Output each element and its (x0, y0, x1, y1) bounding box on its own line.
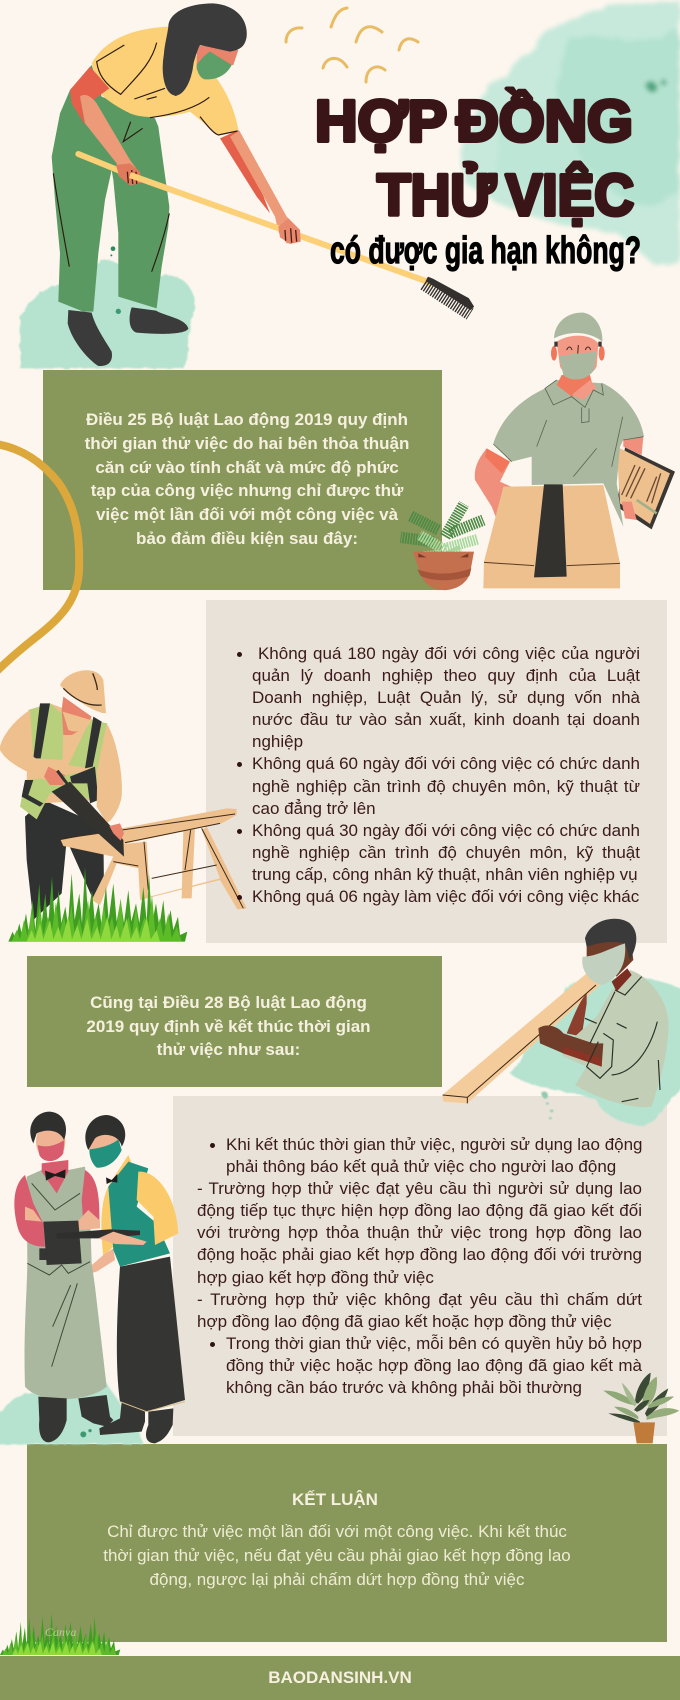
left waiter apron (25, 1167, 107, 1399)
list: end of probation rules: hợp giao kết hợp đồng thử việc (197, 1268, 434, 1287)
text: conclusion: Chỉ được thử việc một lần đối với một công việc. Khi kết thúc (107, 1522, 567, 1541)
safety vest (20, 703, 107, 819)
hair (164, 3, 247, 96)
text: conclusion: thời gian thử việc, nếu đạt yêu cầu phải giao kết hợp đồng lao (103, 1546, 571, 1565)
text: Article 25 intro: Điều 25 Bộ luật Lao động 2019 quy định (86, 410, 408, 429)
right hand on clipboard (622, 502, 637, 520)
sawhorse (61, 808, 247, 909)
packing tape (534, 484, 567, 577)
right waiter bow tie (106, 1174, 117, 1184)
figure: carpenter with saw (0, 670, 247, 942)
potted plant bottom right (603, 1373, 679, 1443)
list: probation limits: nghiệp (252, 732, 303, 751)
list: end of probation rules: Trong thời gian thử việc, mỗi bên có quyền hủy bỏ hợp (226, 1334, 642, 1353)
title line 2: THỬ VIỆC (377, 163, 634, 228)
shirt (92, 27, 238, 135)
right arm (220, 130, 270, 213)
right waiter head (88, 1123, 120, 1160)
heading: conclusion: KẾT LUẬN (292, 1490, 378, 1509)
left hand (116, 163, 142, 185)
panel: Article 25 intro (43, 370, 442, 590)
back sawhorse leg (182, 828, 195, 898)
face mask (559, 352, 597, 380)
list: probation limits: cao đẳng trở lên (252, 799, 376, 818)
pen (637, 500, 657, 513)
panel: Article 28 intro (27, 956, 442, 1087)
list: end of probation rules: không cần báo trước và không phải bồi thường (226, 1378, 582, 1397)
trousers (25, 800, 104, 920)
long hair strand (160, 26, 197, 97)
shirt and pocket lines (53, 43, 237, 272)
text: conclusion: động, ngược lại phải chấm dứt hợp đồng thử việc (150, 1570, 524, 1589)
rake handle left part (78, 154, 130, 175)
list: probation limits: Không quá 06 ngày làm việc đối với công việc khác (252, 887, 639, 906)
list: probation limits: Doanh nghiệp, Luật Quản lý, sử dụng vốn nhà (252, 688, 640, 707)
list: end of probation rules: đồng thử việc hoặc hợp đồng lao động đã giao kết mà (226, 1356, 642, 1375)
list: probation limits: quản lý doanh nghiệp theo quy định của Luật (252, 666, 640, 685)
neck (612, 968, 632, 992)
shirt (560, 970, 668, 1107)
panel: conclusion (27, 1444, 667, 1642)
plank (442, 973, 600, 1103)
text: Article 28 intro: Cũng tại Điều 28 Bộ luật Lao động (90, 993, 367, 1012)
trousers (52, 65, 169, 312)
decorative arcs (286, 8, 418, 82)
figure: delivery man with box (401, 313, 675, 590)
potted fern (401, 504, 483, 590)
right hand on rake (278, 218, 301, 244)
list: probation limits: trung cấp, công nhân kỹ thuật, nhân viên nghiệp vụ (252, 865, 638, 884)
face (587, 933, 633, 977)
text: Article 28 intro (86, 993, 371, 1059)
shirt lines (585, 977, 660, 1102)
left waiter legs and shoes (38, 1397, 67, 1442)
right arm (97, 723, 122, 823)
watercolor blob under woman (20, 260, 195, 368)
apron lines (27, 1183, 90, 1367)
grass (8, 867, 187, 942)
text: Article 28 intro: 2019 quy định về kết thúc thời gian (86, 1017, 371, 1036)
left waiter shirt front (42, 1160, 68, 1193)
left arm (475, 448, 520, 523)
helmet (60, 670, 106, 713)
torso (27, 703, 103, 803)
list: end of probation rules: - Trường hợp thử việc đạt yêu cầu thì người sử dụng lao (197, 1179, 642, 1198)
box (483, 485, 620, 588)
vest straps (22, 703, 102, 807)
rake head (424, 279, 472, 314)
eyes and nose (567, 345, 591, 355)
list: end of probation rules: động tiếp tục thực hiện hợp đồng lao động đã giao kết đối (197, 1201, 642, 1220)
list: end of probation rules: hợp đồng lao động đã giao kết hoặc hợp đồng thử việc (197, 1312, 612, 1331)
list: end of probation rules: - Trường hợp thử việc không đạt yêu cầu thì chấm dứt (197, 1290, 642, 1309)
decorative yellow curve (0, 444, 79, 672)
figure: two waiters (0, 1112, 185, 1444)
clipboard (617, 447, 675, 529)
forearm behind clipboard (623, 437, 643, 455)
text: Article 25 intro (84, 410, 409, 548)
list: end of probation rules (197, 1135, 643, 1397)
watercolor blob: top right (460, 0, 680, 265)
left waiter head (36, 1122, 65, 1161)
hand on wood (109, 823, 124, 841)
figure: man carrying plank (442, 919, 668, 1107)
text: Article 25 intro: việc một lần đối với một công việc và (96, 505, 398, 524)
shirt (493, 380, 644, 527)
right waiter apron (117, 1257, 185, 1412)
text: Article 25 intro: thời gian thử việc do hai bên thỏa thuận (85, 434, 409, 453)
footer: site name: BAODANSINH.VN (268, 1668, 412, 1687)
left sleeve underside (70, 67, 109, 125)
black folder (43, 1221, 82, 1265)
right waiter yellow shirt (101, 1155, 132, 1257)
list: probation limits: nghề nghiệp cần trình độ chuyên môn, kỹ thuật từ (252, 777, 640, 796)
arm (538, 1026, 603, 1067)
list: end of probation rules: với trường hợp thỏa thuận thử việc trong hợp đồng lao (197, 1223, 642, 1242)
tray (57, 1229, 140, 1238)
text: Article 25 intro: bảo đảm điều kiện sau đây: (136, 529, 358, 548)
face and neck (62, 697, 92, 735)
left waiter bow tie (45, 1169, 66, 1181)
text: Article 28 intro: thử việc như sau: (157, 1040, 300, 1059)
text: Article 25 intro: tạp của công việc nhưng chỉ được thử (91, 481, 403, 500)
figure: woman with rake (20, 3, 300, 368)
face mask (582, 943, 625, 985)
cap (554, 313, 602, 342)
list: probation limits (237, 644, 640, 906)
grass watermark: Canva (45, 1625, 76, 1639)
list: probation limits: nước đầu tư vào sản xuất, kinh doanh tại doanh (252, 710, 640, 729)
list: probation limits: Không quá 180 ngày đối với công việc của người (258, 644, 640, 663)
list: end of probation rules: phải thông báo kết quả thử việc cho người lao động (226, 1157, 616, 1176)
title line 1: HỢP ĐỒNG (315, 89, 633, 154)
grass bottom left (0, 1612, 120, 1655)
collar and shirt lines (493, 380, 643, 477)
left arm (0, 710, 50, 780)
face (197, 45, 238, 70)
right waiter vest (108, 1162, 170, 1267)
panel: probation duration list (206, 600, 667, 943)
right waiter trouser legs and shoes (99, 1402, 145, 1435)
list: end of probation rules: động hoặc phải giao kết hợp đồng lao động đối với trường (197, 1245, 642, 1264)
face mask (197, 52, 232, 79)
neck (557, 375, 593, 397)
watercolor blob under waiters (0, 1383, 143, 1444)
footer bar (0, 1656, 680, 1700)
text: conclusion (103, 1522, 571, 1589)
left waiter folded hand (77, 1210, 100, 1230)
hand on saw (44, 767, 65, 785)
watercolor blob behind plank man (510, 977, 680, 1127)
rake handle (130, 175, 434, 284)
panel: end of probation rules (173, 1096, 667, 1436)
list: probation limits: Không quá 60 ngày đối với công việc có chức danh (252, 754, 640, 773)
far hand (567, 993, 587, 1037)
left arm (80, 95, 142, 185)
hair (585, 919, 636, 960)
list: probation limits: Không quá 30 ngày đối với công việc có chức danh (252, 821, 640, 840)
text: Article 25 intro: căn cứ vào tính chất và mức độ phức (95, 458, 399, 477)
right waiter neck and hand arm (68, 1248, 115, 1277)
saw (52, 782, 124, 857)
list: end of probation rules: Khi kết thúc thời gian thử việc, người sử dụng lao động (226, 1135, 643, 1154)
left waiter sleeves (14, 1175, 45, 1247)
right waiter sleeve (137, 1172, 178, 1245)
ears and face (551, 346, 557, 361)
list: probation limits: nghề nghiệp cần trình độ chuyên môn, kỹ thuật (252, 843, 640, 862)
shoes (68, 310, 112, 366)
right waiter hand under tray (98, 1232, 147, 1245)
